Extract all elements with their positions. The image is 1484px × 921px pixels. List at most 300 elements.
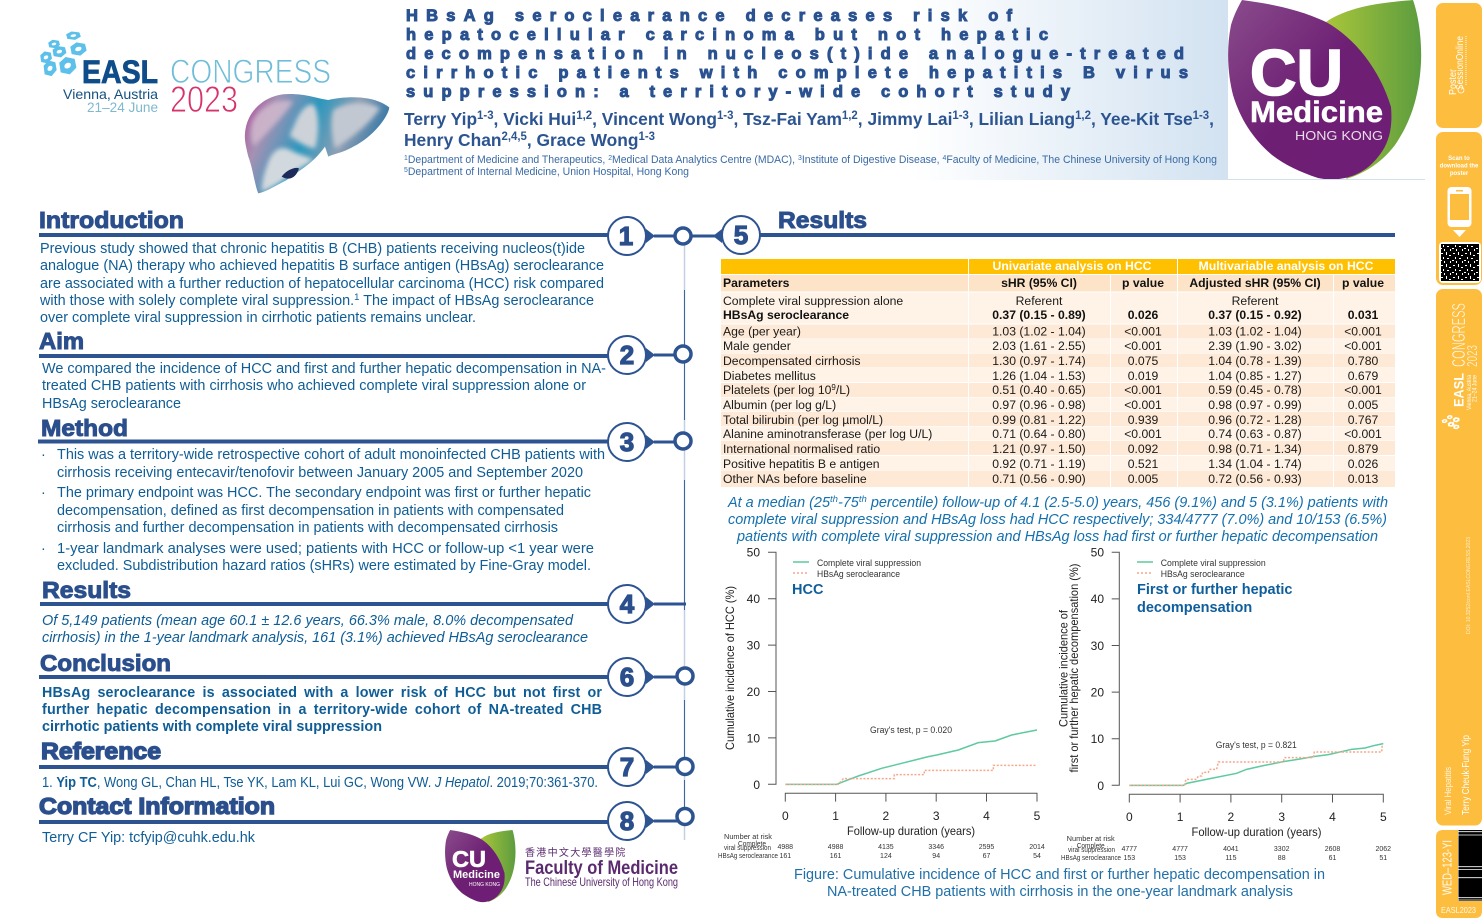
curves xyxy=(1129,744,1383,785)
text: conclusion body: further hepatic decompensation in a territory-wide cohort of NA-treated CHB xyxy=(42,702,602,718)
row: male gender: 2.03 (1.61 - 2.55) xyxy=(992,339,1086,353)
number at risk table: 153 xyxy=(1123,855,1135,862)
text: aim body: HBsAg seroclearance xyxy=(42,396,181,412)
authors: 2,4,5 xyxy=(501,131,527,143)
number at risk table xyxy=(718,834,1045,860)
row: other NAs before baseline xyxy=(721,470,1395,487)
annotation: Gray's test, p = 0.020 xyxy=(870,725,952,735)
sidebar panel: scan to download: Scan to xyxy=(1448,156,1470,162)
row: positive hepatitis B e antigen: 0.521 xyxy=(1128,457,1158,471)
authors: , Yee-Kit Tse xyxy=(1091,109,1193,129)
x axis xyxy=(1126,794,1387,839)
table: univariate and multivariable analysis on HCC xyxy=(721,259,1395,487)
row: international normalised ratio: 0.98 (0.71 - 1.34) xyxy=(1208,442,1302,456)
logo: CU Medicine Faculty of Medicine: HONG KONG xyxy=(469,882,500,888)
logo: EASL Congress 2023: Vienna, Austria xyxy=(63,86,158,102)
affiliations: Department of Medicine and Therapeutics, xyxy=(408,154,608,166)
text: follow-up summary: -75 xyxy=(838,495,860,511)
chart title: decompensation xyxy=(1137,600,1252,616)
row: albumin: 0.98 (0.97 - 0.99) xyxy=(1208,398,1302,412)
curves xyxy=(785,730,1037,784)
sidebar panel: poster code and barcode: EASL2023 xyxy=(1441,905,1476,915)
table column header row: Adjusted sHR (95% CI) xyxy=(1189,276,1321,290)
bullet list: method: cirrhosis and further decompensation in patients with decompensated cirrhosis xyxy=(57,520,558,536)
row: decompensated cirrhosis: 0.780 xyxy=(1348,354,1378,368)
x axis: 5 xyxy=(1034,809,1041,823)
bullet list: method: This was a territory-wide retrospective cohort of adult monoinfected CHB patients with xyxy=(57,447,605,463)
x axis: 3 xyxy=(1278,810,1285,824)
row: other NAs before baseline: Other NAs before baseline xyxy=(723,472,867,486)
number at risk table: 94 xyxy=(932,853,940,860)
number at risk table: 4988 xyxy=(828,844,843,851)
heading: Results: Results xyxy=(778,207,867,233)
row: platelets: 0.51 (0.40 - 0.65) xyxy=(992,383,1086,397)
authors: 1-3 xyxy=(1193,110,1209,122)
logo: CU Medicine Hong Kong: Medicine xyxy=(1250,96,1383,129)
row: total bilirubin: Total bilirubin (per log µmol/L) xyxy=(723,413,883,427)
authors: 1-3 xyxy=(639,131,655,143)
row: age: Age (per year) xyxy=(723,324,801,338)
row: albumin: <0.001 xyxy=(1124,398,1162,412)
affiliations: 1 xyxy=(404,155,408,162)
section: Aim xyxy=(39,328,691,412)
number at risk table: HBsAg seroclearance xyxy=(718,853,778,860)
number at risk table: Complete xyxy=(738,841,766,848)
sidebar panel: congress details xyxy=(1436,289,1482,826)
row: albumin: Albumin (per log g/L) xyxy=(723,398,836,412)
row: decompensated cirrhosis: 1.04 (0.78 - 1.39) xyxy=(1208,354,1302,368)
text: introduction body: 1 xyxy=(354,292,359,303)
bullet list: method: excluded. Subdistribution hazard ratios (sHRs) were estimated by Fine-Gray model. xyxy=(57,558,591,574)
row: reference and HBsAg seroclearance: 0.031 xyxy=(1348,308,1378,322)
authors: 1-3 xyxy=(952,110,969,122)
row: albumin xyxy=(721,398,1395,412)
row: other NAs before baseline: 0.005 xyxy=(1128,472,1158,486)
y axis xyxy=(1056,546,1119,793)
authors: 1,2 xyxy=(1075,110,1091,122)
number at risk table: 161 xyxy=(830,853,842,860)
row: age: 1.03 (1.02 - 1.04) xyxy=(992,324,1086,338)
bullet list: method: 1-year landmark analyses were used; patients with HCC or follow-up <1 year were xyxy=(57,541,594,557)
number at risk table: 2595 xyxy=(979,844,994,851)
row: total bilirubin: 0.767 xyxy=(1348,413,1378,427)
sidebar panel: scan to download: download the xyxy=(1440,164,1479,170)
marker 2 xyxy=(608,336,691,374)
y axis: Cumulative incidence of xyxy=(1056,609,1070,727)
authors: , Vicki Hui xyxy=(494,109,576,129)
sidebar panel: congress details: CONGRESS xyxy=(1449,303,1469,367)
marker 8: 8 xyxy=(620,806,634,836)
header background gradient xyxy=(400,0,1228,180)
row: reference and HBsAg seroclearance: 0.37 (0.15 - 0.89) xyxy=(992,308,1086,322)
logo: EASL Congress 2023: 2023 xyxy=(170,79,238,120)
row: decompensated cirrhosis xyxy=(721,354,1395,368)
row: decompensated cirrhosis: 0.075 xyxy=(1128,354,1158,368)
row: platelets: <0.001 xyxy=(1124,383,1162,397)
row: age xyxy=(721,324,1395,338)
text: follow-up summary: patients with complete viral suppression and HBsAg loss had first or further hepatic decompensation xyxy=(736,529,1378,545)
number at risk table: 4988 xyxy=(778,844,793,851)
y axis: 30 xyxy=(747,638,760,652)
sidebar panel: congress details: 2023 xyxy=(1464,345,1481,367)
row: other NAs before baseline: 0.72 (0.56 - 0.93) xyxy=(1208,472,1302,486)
affiliations: 5 xyxy=(404,167,408,174)
row: male gender: <0.001 xyxy=(1124,339,1162,353)
row: positive hepatitis B e antigen: 0.026 xyxy=(1348,457,1378,471)
number at risk table: viral suppression xyxy=(1068,847,1115,854)
number at risk table: 124 xyxy=(880,853,892,860)
row: international normalised ratio xyxy=(721,441,1395,456)
sidebar panel: congress details: 21–24 June xyxy=(1472,375,1478,402)
text: conclusion body: cirrhotic patients with complete viral suppression xyxy=(42,719,382,735)
section: Results left xyxy=(40,577,686,646)
text: aim body xyxy=(42,361,606,412)
number at risk table: 161 xyxy=(779,853,791,860)
chart title: First or further hepatic xyxy=(1137,582,1292,598)
number at risk table: HBsAg seroclearance xyxy=(1061,855,1121,862)
title: decompensation in nucleos(t)ide analogue-treated xyxy=(406,45,1184,63)
title: hepatocellular carcinoma but not hepatic xyxy=(406,26,1048,44)
y axis: 0 xyxy=(753,778,760,792)
row: international normalised ratio: International normalised ratio xyxy=(723,442,880,456)
heading: Reference: Reference xyxy=(41,738,161,764)
row: alanine aminotransferase xyxy=(721,426,1395,441)
number at risk table: 3302 xyxy=(1274,846,1290,853)
heading: Contact Information: Contact Information xyxy=(39,793,275,819)
text: aim body: treated CHB patients with cirrhosis who achieved complete viral suppression alone or xyxy=(42,378,586,394)
row: total bilirubin: 0.99 (0.81 - 1.22) xyxy=(992,413,1086,427)
y axis: 0 xyxy=(1097,779,1104,793)
row: male gender: <0.001 xyxy=(1344,339,1382,353)
x axis: Follow-up duration (years) xyxy=(847,824,975,838)
marker 5 xyxy=(690,216,760,254)
x axis: 4 xyxy=(1329,810,1336,824)
text: introduction body: over complete viral suppression in cirrhotic patients remains unclear. xyxy=(40,310,476,326)
marker 5: 5 xyxy=(734,220,748,250)
table column header row: p value xyxy=(1122,276,1164,290)
figure caption: Figure: Cumulative incidence of HCC and first or further hepatic decompensation in xyxy=(794,867,1325,883)
table column header row: Parameters xyxy=(723,276,790,290)
marker 6: 6 xyxy=(620,662,634,692)
affiliations xyxy=(404,154,1217,178)
text: follow-up summary: percentile) follow-up of 4.1 (2.5-5.0) years, 456 (9.1%) and 5 (3.1%) patients with xyxy=(867,495,1388,511)
sidebar panel: poster code and barcode: WED–123-YI xyxy=(1440,840,1454,895)
row: diabetes mellitus xyxy=(721,368,1395,383)
affiliations: 2 xyxy=(608,155,612,162)
logo: CU Medicine Faculty of Medicine: Faculty of Medicine xyxy=(525,858,678,879)
row: total bilirubin: 0.939 xyxy=(1128,413,1158,427)
row: diabetes mellitus: Diabetes mellitus xyxy=(723,369,816,383)
number at risk table: 51 xyxy=(1379,855,1387,862)
figure caption xyxy=(794,867,1325,900)
row: reference and HBsAg seroclearance: 0.026 xyxy=(1128,308,1158,322)
marker 3 xyxy=(608,423,691,461)
x axis: 1 xyxy=(1177,810,1184,824)
section: Reference xyxy=(39,738,693,791)
row: platelets: /L) xyxy=(836,383,850,397)
marker 4 xyxy=(608,585,686,623)
marker 2: 2 xyxy=(620,340,634,370)
logo: CU Medicine Hong Kong: CU xyxy=(1250,36,1343,109)
sidebar panel: Poster Session Online: SessionOnline xyxy=(1455,36,1466,90)
y axis: 40 xyxy=(747,592,760,606)
row: reference and HBsAg seroclearance: Complete viral suppression alone xyxy=(723,294,903,308)
marker 8 xyxy=(608,802,693,840)
row: international normalised ratio: 0.092 xyxy=(1128,442,1158,456)
number at risk table: Number at risk xyxy=(1067,836,1115,843)
number at risk table: Number at risk xyxy=(724,834,773,841)
heading: Introduction: Introduction xyxy=(39,207,184,233)
number at risk table: 88 xyxy=(1278,855,1286,862)
number at risk table: 3346 xyxy=(928,844,944,851)
row: reference and HBsAg seroclearance: Referent xyxy=(1016,294,1063,308)
row: reference and HBsAg seroclearance: Referent xyxy=(1232,294,1279,308)
table column header row xyxy=(721,275,1395,292)
sidebar panel: congress details: Vienna, Austria xyxy=(1466,375,1473,410)
row: diabetes mellitus: 1.26 (1.04 - 1.53) xyxy=(992,369,1086,383)
x axis: 2 xyxy=(883,809,890,823)
row: platelets: 9 xyxy=(831,383,836,392)
logo: CU Medicine Hong Kong: HONG KONG xyxy=(1295,128,1383,143)
authors: 1-3 xyxy=(477,110,494,122)
y axis: 20 xyxy=(1091,686,1104,700)
row: platelets: Platelets (per log 10 xyxy=(723,383,831,397)
marker 6 xyxy=(608,658,693,696)
row: reference and HBsAg seroclearance xyxy=(721,292,1395,324)
text: results summary xyxy=(42,613,588,646)
legend: Complete viral suppression xyxy=(1161,558,1266,568)
text: results summary: Of 5,149 patients (mean age 60.1 ± 12.6 years, 66.3% male, 8.0% decompensated xyxy=(42,613,574,629)
row: reference and HBsAg seroclearance: 0.37 (0.15 - 0.92) xyxy=(1208,308,1302,322)
logo: CU Medicine Faculty of Medicine: 香港中文大學醫學院 xyxy=(525,846,627,859)
row: male gender: Male gender xyxy=(723,339,791,353)
text: introduction body xyxy=(39,241,604,326)
title xyxy=(406,7,1188,101)
chart: cumulative incidence of HCC xyxy=(718,546,1045,860)
y axis: 50 xyxy=(747,546,760,560)
marker 1 xyxy=(608,217,691,255)
legend: HBsAg seroclearance xyxy=(1161,569,1245,579)
chart: cumulative incidence of hepatic decompensation xyxy=(1056,546,1391,862)
logo: CU Medicine Hong Kong xyxy=(1228,0,1425,180)
text: follow-up summary: th xyxy=(859,494,867,505)
table header band: Univariate analysis on HCC xyxy=(992,259,1152,273)
QR code xyxy=(1439,242,1481,283)
authors: , xyxy=(1209,109,1214,129)
authors: 1,2 xyxy=(576,110,592,122)
y axis: 40 xyxy=(1091,592,1104,606)
row: diabetes mellitus: 0.679 xyxy=(1348,369,1378,383)
authors: 1-3 xyxy=(717,110,733,122)
heading: Method: Method xyxy=(41,415,128,441)
title: suppression: a territory-wide cohort study xyxy=(406,83,1071,101)
icon: liver illustration xyxy=(245,94,389,193)
number at risk table: 2608 xyxy=(1325,846,1340,853)
figure caption: NA-treated CHB patients with cirrhosis in the one-year landmark analysis xyxy=(827,884,1293,900)
number at risk table xyxy=(1061,836,1391,862)
sidebar panel: Poster Session Online: Poster xyxy=(1448,68,1459,95)
y axis: 50 xyxy=(1091,546,1104,560)
x axis: 1 xyxy=(832,809,839,823)
row: positive hepatitis B e antigen: 1.34 (1.04 - 1.74) xyxy=(1208,457,1302,471)
authors: , Vincent Wong xyxy=(592,109,717,129)
sidebar panel: scan to download: poster xyxy=(1450,171,1469,177)
bullet list: method: · xyxy=(41,447,46,463)
number at risk table: 2014 xyxy=(1029,844,1045,851)
authors xyxy=(404,109,1214,150)
authors: 1,2 xyxy=(842,110,858,122)
row: decompensated cirrhosis: Decompensated cirrhosis xyxy=(723,354,861,368)
marker 3: 3 xyxy=(620,427,634,457)
row: other NAs before baseline: 0.71 (0.56 - 0.90) xyxy=(992,472,1086,486)
number at risk table: 4777 xyxy=(1122,846,1137,853)
text: conclusion body xyxy=(42,685,602,735)
sidebar panel: congress details: EASL xyxy=(1451,373,1467,407)
number at risk table: 4041 xyxy=(1223,846,1239,853)
text: introduction body: analogue (NA) therapy who achieved hepatitis B surface antigen (HBsAg) seroclearance xyxy=(40,258,604,274)
sidebar panel: poster code and barcode xyxy=(1436,830,1482,918)
row: reference and HBsAg seroclearance: HBsAg seroclearance xyxy=(723,308,849,322)
text: contact email: Terry CF Yip: tcfyip@cuhk.edu.hk xyxy=(42,830,256,846)
affiliations: 3 xyxy=(798,155,802,162)
authors: Henry Chan xyxy=(404,130,502,150)
table column header row: sHR (95% CI) xyxy=(1001,276,1077,290)
table header band: Multivariable analysis on HCC xyxy=(1198,259,1374,273)
text: introduction body: are associated with a further reduction of hepatocellular carcinoma (HCC) risk compared xyxy=(40,276,604,292)
text: conclusion body: HBsAg seroclearance is associated with a lower risk of HCC but not first or xyxy=(42,685,602,701)
row: international normalised ratio: 0.879 xyxy=(1348,442,1378,456)
annotation: Gray's test, p = 0.821 xyxy=(1216,740,1297,750)
row: age: <0.001 xyxy=(1124,324,1162,338)
sidebar panel: congress details: DOI: 10.3252/conf.EASLCONGRESS.2023 xyxy=(1466,537,1472,634)
title: cirrhotic patients with complete hepatitis B virus xyxy=(406,64,1188,82)
row: decompensated cirrhosis: 1.30 (0.97 - 1.74) xyxy=(992,354,1086,368)
section: Introduction xyxy=(39,207,691,326)
authors: , Jimmy Lai xyxy=(858,109,952,129)
section: Contact Information xyxy=(39,793,693,846)
row: positive hepatitis B e antigen: 0.92 (0.71 - 1.19) xyxy=(992,457,1086,471)
connector spine xyxy=(684,236,686,840)
x axis: 0 xyxy=(782,809,789,823)
chart title: HCC xyxy=(792,582,824,598)
legend: HBsAg seroclearance xyxy=(817,569,900,579)
text: citation: 1. Yip TC, Wong GL, Chan HL, Tse YK, Lam KL, Lui GC, Wong VW. J Hepatol. 2019;70:361-370. xyxy=(42,775,598,791)
y axis: 20 xyxy=(747,685,760,699)
affiliations: 4 xyxy=(942,155,946,162)
marker 4: 4 xyxy=(620,589,635,619)
row: alanine aminotransferase: Alanine aminotransferase (per log U/L) xyxy=(723,427,932,441)
legend: Complete viral suppression xyxy=(817,558,921,568)
heading: Conclusion: Conclusion xyxy=(40,650,171,676)
text: follow-up summary: complete viral suppression and HBsAg loss had HCC respectively; 334/4777 (7.0%) and 10/153 (6.5%) xyxy=(728,512,1387,528)
row: diabetes mellitus: 1.04 (0.85 - 1.27) xyxy=(1208,369,1302,383)
bullet list: method: · xyxy=(41,485,46,501)
sidebar panel: congress details: Viral Hepatitis xyxy=(1443,767,1454,815)
row: positive hepatitis B e antigen xyxy=(721,456,1395,471)
section: Results right header xyxy=(690,207,1395,254)
x axis: 2 xyxy=(1228,810,1235,824)
logo: CU Medicine Faculty of Medicine xyxy=(445,830,678,902)
affiliations: Faculty of Medicine, The Chinese University of Hong Kong xyxy=(946,154,1217,166)
logo: CU Medicine Faculty of Medicine: The Chinese University of Hong Kong xyxy=(525,876,678,889)
marker 7: 7 xyxy=(620,752,634,782)
row: positive hepatitis B e antigen: Positive hepatitis B e antigen xyxy=(723,457,880,471)
x axis xyxy=(782,793,1041,838)
row: male gender: 2.39 (1.90 - 3.02) xyxy=(1208,339,1302,353)
text: introduction body: The impact of HBsAg seroclearance xyxy=(359,293,594,309)
row: other NAs before baseline: 0.013 xyxy=(1348,472,1378,486)
number at risk table: 153 xyxy=(1174,855,1186,862)
row: platelets xyxy=(721,383,1395,397)
section: Conclusion xyxy=(39,650,693,735)
logo: EASL Congress 2023: 21–24 June xyxy=(87,99,158,115)
row: age: <0.001 xyxy=(1344,324,1382,338)
row: platelets: <0.001 xyxy=(1344,383,1382,397)
x axis: Follow-up duration (years) xyxy=(1192,825,1322,839)
legend xyxy=(793,558,921,579)
bullet list: method: · xyxy=(41,541,46,557)
row: platelets: 0.59 (0.45 - 0.78) xyxy=(1208,383,1302,397)
number at risk table: 54 xyxy=(1033,853,1041,860)
bullet list: method: cirrhosis receiving entecavir/tenofovir between January 2005 and September 2020 xyxy=(57,465,583,481)
row: international normalised ratio: 1.21 (0.97 - 1.50) xyxy=(992,442,1086,456)
number at risk table: 61 xyxy=(1329,855,1336,862)
row: alanine aminotransferase: <0.001 xyxy=(1344,427,1382,441)
number at risk table: 115 xyxy=(1225,855,1237,862)
row: alanine aminotransferase: 0.71 (0.64 - 0.80) xyxy=(992,427,1086,441)
marker 1: 1 xyxy=(619,221,633,251)
y axis xyxy=(723,546,776,792)
text: results summary: cirrhosis) in the 1-year landmark analysis, 161 (3.1%) achieved HBsAg seroclearance xyxy=(42,630,588,646)
x axis: 4 xyxy=(983,809,990,823)
row: alanine aminotransferase: 0.74 (0.63 - 0.87) xyxy=(1208,427,1302,441)
y axis: 30 xyxy=(1091,639,1104,653)
authors: Terry Yip xyxy=(404,109,478,129)
x axis: 5 xyxy=(1380,810,1387,824)
number at risk table: Complete xyxy=(1077,843,1105,850)
sidebar panel: scan to download xyxy=(1436,132,1482,285)
row: alanine aminotransferase: <0.001 xyxy=(1124,427,1162,441)
row: total bilirubin xyxy=(721,412,1395,427)
text: aim body: We compared the incidence of HCC and first and further hepatic decompensation in NA- xyxy=(42,361,606,377)
sidebar panel: congress details: Terry Cheuk-Fung Yip xyxy=(1461,735,1472,815)
authors: , Tsz-Fai Yam xyxy=(733,109,842,129)
text: introduction body: Previous study showed that chronic hepatitis B (CHB) patients receiving nucleos(t)ide xyxy=(40,241,585,257)
title: HBsAg seroclearance decreases risk of xyxy=(406,7,1012,25)
table header band xyxy=(721,259,1395,274)
bullet list: method: decompensation, defined as first decompensation in patients with compensated xyxy=(57,503,564,519)
row: male gender xyxy=(721,339,1395,353)
row: total bilirubin: 0.96 (0.72 - 1.28) xyxy=(1208,413,1302,427)
text: introduction body: with those with solely complete viral suppression. xyxy=(40,293,352,309)
heading: Aim: Aim xyxy=(39,328,84,354)
row: albumin: 0.005 xyxy=(1348,398,1378,412)
authors: , Grace Wong xyxy=(527,130,639,150)
row: albumin: 0.97 (0.96 - 0.98) xyxy=(992,398,1086,412)
logo: EASL Congress 2023: CONGRESS xyxy=(170,53,331,91)
marker 7 xyxy=(608,748,693,786)
affiliations: Medical Data Analytics Centre (MDAC), xyxy=(612,154,798,166)
number at risk table: 2062 xyxy=(1376,846,1391,853)
row: age: 1.03 (1.02 - 1.04) xyxy=(1208,324,1302,338)
bullet list: method: The primary endpoint was HCC. The secondary endpoint was first or further hepatic xyxy=(57,485,591,501)
barcode xyxy=(1458,830,1482,901)
logo: EASL Congress 2023 xyxy=(40,31,331,120)
heading: Results: Results xyxy=(42,577,131,603)
sidebar panel: Poster Session Online xyxy=(1436,3,1482,128)
x axis: 3 xyxy=(933,809,940,823)
y axis: 10 xyxy=(1091,732,1104,746)
